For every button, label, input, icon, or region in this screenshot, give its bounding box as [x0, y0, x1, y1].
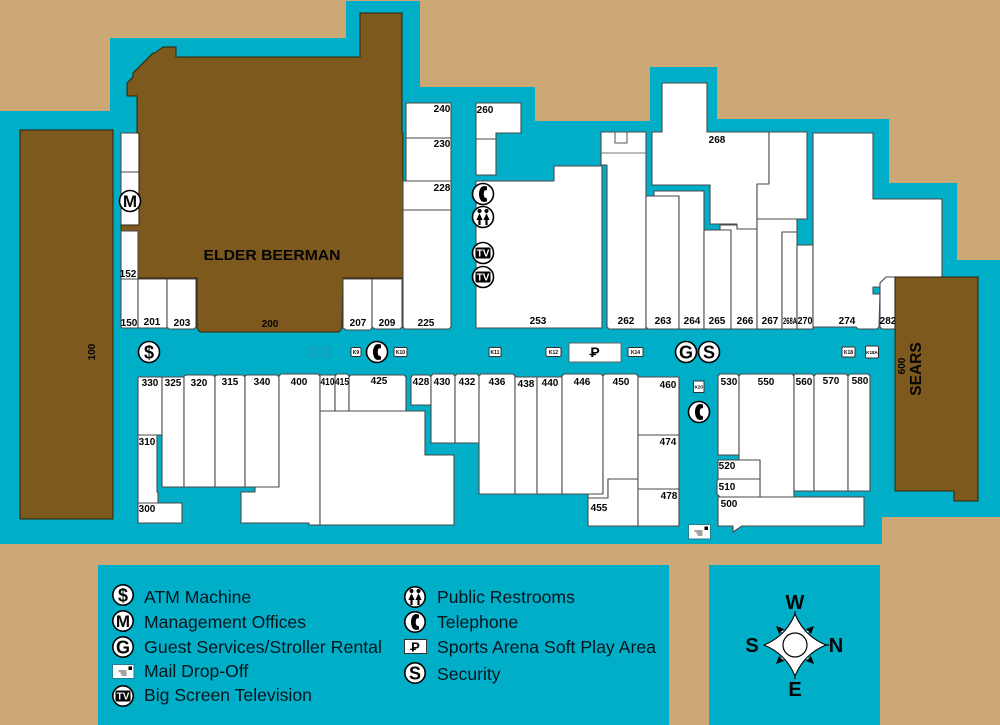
- kiosk K10: K10: [396, 350, 405, 356]
- store 262: [601, 132, 646, 329]
- store: unnumbered north of M: [121, 133, 139, 172]
- store 415: [335, 374, 349, 411]
- store 580: [848, 374, 870, 491]
- kiosk K20: [694, 381, 704, 392]
- store 530: [718, 374, 739, 455]
- store 400: [241, 374, 320, 525]
- store 460: 460: [660, 380, 677, 391]
- icon: management offices: M: [123, 192, 137, 211]
- store 267: 267: [762, 316, 779, 327]
- store 207: [343, 279, 372, 330]
- store 268A: 268A: [783, 316, 797, 326]
- store 410: 410: [320, 377, 335, 388]
- store 253: 253: [530, 316, 547, 327]
- legend item: guest services: G: [116, 638, 130, 658]
- store 267: [757, 219, 797, 329]
- store 425: [349, 375, 406, 411]
- store 450: [588, 374, 638, 498]
- kiosk K9: [351, 348, 361, 356]
- store 240: 240: [434, 104, 451, 115]
- store 270: 270: [798, 316, 813, 327]
- store 436: [479, 374, 515, 494]
- store 325: [162, 377, 184, 487]
- store 550: 550: [758, 377, 775, 388]
- legend item: management offices: Management Offices: [144, 612, 306, 632]
- store 510: [717, 479, 760, 497]
- store 455: [588, 479, 638, 526]
- legend item: big screen television: TV: [117, 692, 130, 703]
- store 315: 315: [222, 377, 239, 388]
- kiosk K20: K20: [694, 384, 703, 390]
- store 230: 230: [434, 139, 451, 150]
- anchor: Sears: [895, 277, 978, 501]
- store south of 260: [476, 139, 496, 175]
- store 436: 436: [489, 377, 506, 388]
- icon: ATM: $: [144, 342, 154, 362]
- store 474: [638, 435, 679, 489]
- store 201: [138, 279, 167, 328]
- store 478: 478: [661, 491, 678, 502]
- kiosk K12: [546, 348, 561, 356]
- store 203: [167, 279, 196, 329]
- panel: compass: [709, 565, 880, 725]
- store 500: 500: [721, 499, 738, 510]
- store 478: [638, 489, 679, 526]
- icon: big screen TV 2: TV: [477, 273, 490, 284]
- kiosk K10: [394, 348, 407, 356]
- store 432: [455, 374, 479, 443]
- kiosk K9: K9: [353, 350, 359, 356]
- anchor: Sears: SEARS: [908, 342, 925, 396]
- store 310: [138, 435, 158, 503]
- store 209: [372, 279, 402, 329]
- store 230: [406, 138, 451, 181]
- legend item: big screen television: Big Screen Television: [144, 685, 312, 705]
- kiosk K14: K14: [631, 350, 640, 356]
- store 340: 340: [254, 377, 271, 388]
- icon: big screen TV 2: [472, 266, 494, 288]
- icon: telephone south: [688, 402, 710, 422]
- store: management: [121, 172, 139, 225]
- icon: big screen TV 1: TV: [477, 249, 490, 260]
- kiosk K18: K18: [844, 350, 853, 356]
- store 228: 228: [434, 183, 451, 194]
- store 263: 263: [655, 316, 672, 327]
- store 510: 510: [719, 482, 736, 493]
- store 209: 209: [379, 318, 396, 329]
- store 570: [814, 374, 848, 491]
- teal mall footprint: [0, 1, 1000, 544]
- store 330: [138, 377, 162, 435]
- store 315: [215, 375, 245, 487]
- icon: telephone north: [472, 184, 494, 204]
- icon: telephone corridor west: [366, 342, 388, 362]
- kiosk K11: [489, 348, 501, 356]
- store 450: 450: [613, 377, 630, 388]
- store 203: 203: [174, 318, 191, 329]
- store 560: [794, 374, 814, 491]
- compass letter S: S: [745, 635, 759, 657]
- store 425: 425: [371, 376, 388, 387]
- kiosk faint 2: [322, 348, 332, 356]
- store 310: 310: [139, 437, 156, 448]
- icon: guest services: G: [679, 342, 693, 362]
- store 150: [121, 279, 138, 329]
- store 446: [562, 374, 603, 494]
- store north of 267: [757, 132, 807, 219]
- store 320: 320: [191, 378, 208, 389]
- store 580: 580: [852, 376, 869, 387]
- store 265: [704, 230, 731, 329]
- legend item: management offices: M: [116, 612, 130, 631]
- kiosk faint 1: [308, 348, 316, 356]
- kiosk K18A: K18A: [866, 350, 879, 355]
- icon: big screen TV 1: [472, 242, 494, 264]
- kiosk K14: [628, 348, 643, 356]
- store 240: [406, 103, 451, 138]
- store 530: 530: [721, 377, 738, 388]
- panel: legend: [98, 565, 669, 725]
- store 438: 438: [518, 379, 535, 390]
- legend item: telephone: Telephone: [437, 612, 518, 632]
- store 260: [476, 103, 521, 139]
- store 207: 207: [350, 318, 367, 329]
- kiosk K18A: [866, 346, 879, 358]
- store 474: 474: [660, 437, 677, 448]
- kiosk K11: K11: [491, 350, 500, 356]
- legend item: mail drop-off: Mail Drop-Off: [144, 661, 248, 681]
- icon: mail drop-off: [688, 524, 710, 539]
- store 270: [797, 245, 813, 329]
- store 268: 268: [709, 135, 726, 146]
- compass letter W: W: [786, 592, 805, 614]
- icon: security: [698, 342, 720, 362]
- store 262: 262: [618, 316, 635, 327]
- store 410: [320, 375, 335, 411]
- store 263: [646, 196, 679, 329]
- sports arena soft play area: [569, 343, 621, 362]
- store 225: 225: [418, 318, 435, 329]
- store 415: 415: [335, 377, 349, 388]
- sports arena soft play area: P: [590, 344, 600, 360]
- large store south of 410-425: [320, 411, 454, 525]
- store 274: [813, 133, 942, 329]
- store 152: 152: [120, 269, 137, 280]
- anchor: store 100: 100: [87, 343, 98, 360]
- icon: security: S: [703, 342, 715, 362]
- store 460: [638, 377, 679, 435]
- anchor: Elder Beerman: 200: [262, 319, 279, 330]
- store 560: 560: [796, 377, 813, 388]
- anchor: store 100: [20, 130, 113, 519]
- store 264: 264: [684, 316, 701, 327]
- store 253: [476, 166, 602, 328]
- store 152: [120, 231, 138, 280]
- legend item: ATM machine: [113, 585, 251, 607]
- store 274: 274: [839, 316, 856, 327]
- store 400: 400: [291, 377, 308, 388]
- store 266: 266: [737, 316, 754, 327]
- store 430: [431, 374, 455, 443]
- icon: management offices: [120, 190, 140, 212]
- store 340: [245, 375, 279, 487]
- store 260: 260: [477, 105, 494, 116]
- store 432: 432: [459, 377, 476, 388]
- store 320: [184, 375, 215, 487]
- anchor: Elder Beerman: ELDER BEERMAN: [204, 247, 340, 264]
- store 440: 440: [542, 378, 559, 389]
- store 225: [403, 210, 451, 329]
- icon: restrooms: [472, 206, 494, 228]
- kiosk K12: K12: [549, 350, 558, 356]
- store 438: [515, 377, 537, 494]
- store 268A: [782, 232, 797, 329]
- legend item: ATM machine: $: [118, 586, 128, 606]
- icon: ATM: [138, 342, 160, 362]
- store 150: 150: [121, 318, 138, 329]
- store 428: 428: [413, 377, 430, 388]
- store 300: 300: [139, 504, 156, 515]
- legend item: security: [405, 663, 501, 684]
- store 440: [537, 377, 562, 494]
- store 550: [739, 374, 794, 497]
- store 282: [880, 277, 897, 329]
- store 430: 430: [434, 377, 451, 388]
- legend item: security: S: [409, 664, 421, 684]
- legend item: public restrooms: Public Restrooms: [437, 587, 575, 607]
- store 228: [403, 181, 451, 210]
- legend item: sports arena soft play area: P: [411, 640, 420, 654]
- store 268: [652, 83, 769, 229]
- icon: compass rose: [764, 611, 829, 679]
- store 428: [411, 375, 431, 405]
- store 570: 570: [823, 376, 840, 387]
- store 500: [718, 497, 864, 532]
- store 201: 201: [144, 317, 161, 328]
- store 520: [718, 460, 760, 479]
- anchor: Elder Beerman: [121, 13, 403, 332]
- store 325: 325: [165, 378, 182, 389]
- store 265: 265: [709, 316, 726, 327]
- compass letter N: N: [829, 635, 843, 657]
- icon: guest services: [676, 342, 696, 362]
- legend item: ATM machine: ATM Machine: [144, 587, 251, 607]
- kiosk K18: [842, 347, 855, 357]
- store 446: 446: [574, 377, 591, 388]
- store 300: [138, 503, 182, 523]
- store 266: [720, 225, 757, 329]
- legend item: sports arena soft play area: Sports Arena Soft Play Area: [437, 637, 656, 657]
- store 282: 282: [880, 316, 897, 327]
- store 455: 455: [591, 503, 608, 514]
- legend item: guest services: Guest Services/Stroller Rental: [144, 637, 382, 657]
- store 264: [654, 191, 704, 329]
- compass letter E: E: [788, 679, 802, 701]
- store 330: 330: [142, 378, 159, 389]
- anchor: Sears: 600: [897, 357, 908, 374]
- legend item: security: Security: [437, 664, 501, 684]
- store 520: 520: [719, 461, 736, 472]
